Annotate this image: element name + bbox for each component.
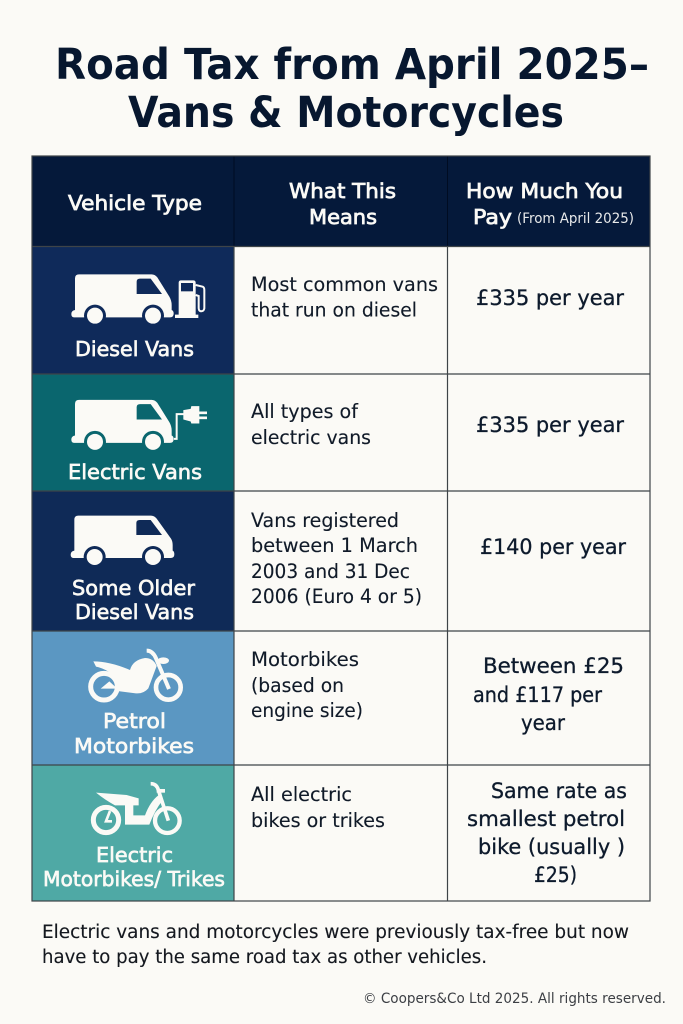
icon: van: [71, 516, 174, 568]
footnote: [42, 922, 629, 968]
price: older diesel: £140 per year: [480, 535, 626, 559]
row: electric vans: [32, 374, 234, 491]
text: electric motorbikes meaning: bikes or trikes: [251, 809, 385, 832]
footnote: have to pay the same road tax as other vehicles.: [42, 947, 487, 968]
price: electric motorbikes: smallest petrol: [467, 807, 625, 831]
label: Motorbikes: [74, 734, 194, 758]
label: Motorbikes/ Trikes: [43, 867, 225, 891]
grid lines: [32, 156, 650, 901]
label: Diesel Vans: [75, 600, 194, 624]
text: diesel meaning: [251, 273, 438, 322]
header: vehicle type: Vehicle Type: [68, 191, 202, 215]
header: how much you pay: Pay: [473, 205, 512, 229]
header: what this means: Means: [309, 205, 377, 229]
header: how much you pay: How Much You: [466, 179, 623, 203]
text: older diesel meaning: Vans registered: [251, 509, 399, 532]
icon: motorbike: [91, 651, 181, 700]
price: petrol motorbikes: Between £25: [483, 654, 624, 678]
text: electric meaning: All types of: [251, 400, 359, 423]
title: Vans & Motorcycles: [128, 88, 564, 138]
header row: [32, 156, 650, 246]
text: petrol motorbikes meaning: Motorbikes: [251, 648, 359, 671]
copyright: © Coopers&Co Ltd 2025. All rights reserved.: [363, 991, 666, 1007]
header: how much you pay: [466, 179, 634, 229]
price: electric motorbikes: bike (usually ): [478, 835, 625, 859]
label: Some Older: [72, 576, 196, 600]
row: diesel vans: [32, 246, 234, 374]
label: Diesel Vans: [75, 337, 194, 361]
icon: electric motorbike: [93, 784, 180, 833]
price: petrol motorbikes: year: [521, 711, 565, 735]
text: diesel meaning: Most common vans: [251, 273, 438, 296]
text: petrol motorbikes meaning: (based on: [251, 674, 344, 697]
text: electric meaning: electric vans: [251, 426, 371, 449]
row: some older diesel vans: [32, 491, 234, 631]
label: Petrol: [103, 709, 166, 733]
label: [74, 709, 194, 758]
text: electric motorbikes meaning: All electric: [251, 783, 352, 806]
title: [55, 40, 649, 138]
text: petrol motorbikes meaning: engine size): [251, 699, 363, 722]
price: petrol motorbikes: and £117 per: [473, 683, 602, 707]
label: [72, 576, 196, 624]
price: petrol motorbikes: [473, 654, 624, 735]
table: [32, 156, 650, 901]
price: electric: £335 per year: [476, 413, 624, 437]
label: Electric: [96, 843, 173, 867]
price: electric motorbikes: Same rate as: [491, 779, 627, 803]
title: Road Tax from April 2025–: [55, 40, 649, 90]
header: what this means: [289, 179, 396, 229]
icon: van with fuel pump: [71, 274, 204, 327]
row: petrol motorbikes: [32, 631, 234, 765]
text: electric motorbikes meaning: [251, 783, 385, 832]
text: older diesel meaning: 2006 (Euro 4 or 5): [251, 585, 422, 608]
footnote: Electric vans and motorcycles were previously tax-free but now: [42, 922, 629, 943]
label: [43, 843, 225, 891]
text: diesel meaning: that run on diesel: [251, 298, 417, 322]
header: how much you pay: (From April 2025): [517, 211, 634, 227]
header: what this means: What This: [289, 179, 396, 203]
icon: van with plug: [71, 400, 207, 453]
text: petrol motorbikes meaning: [251, 648, 363, 722]
text: older diesel meaning: 2003 and 31 Dec: [251, 560, 410, 583]
label: Electric Vans: [68, 460, 202, 484]
price: diesel: £335 per year: [476, 286, 624, 310]
text: older diesel meaning: [251, 509, 422, 608]
text: electric meaning: [251, 400, 371, 449]
price: electric motorbikes: [467, 779, 627, 887]
text: older diesel meaning: between 1 March: [251, 534, 418, 557]
price: electric motorbikes: £25): [534, 863, 577, 887]
row: electric motorbikes and trikes: [32, 765, 234, 901]
